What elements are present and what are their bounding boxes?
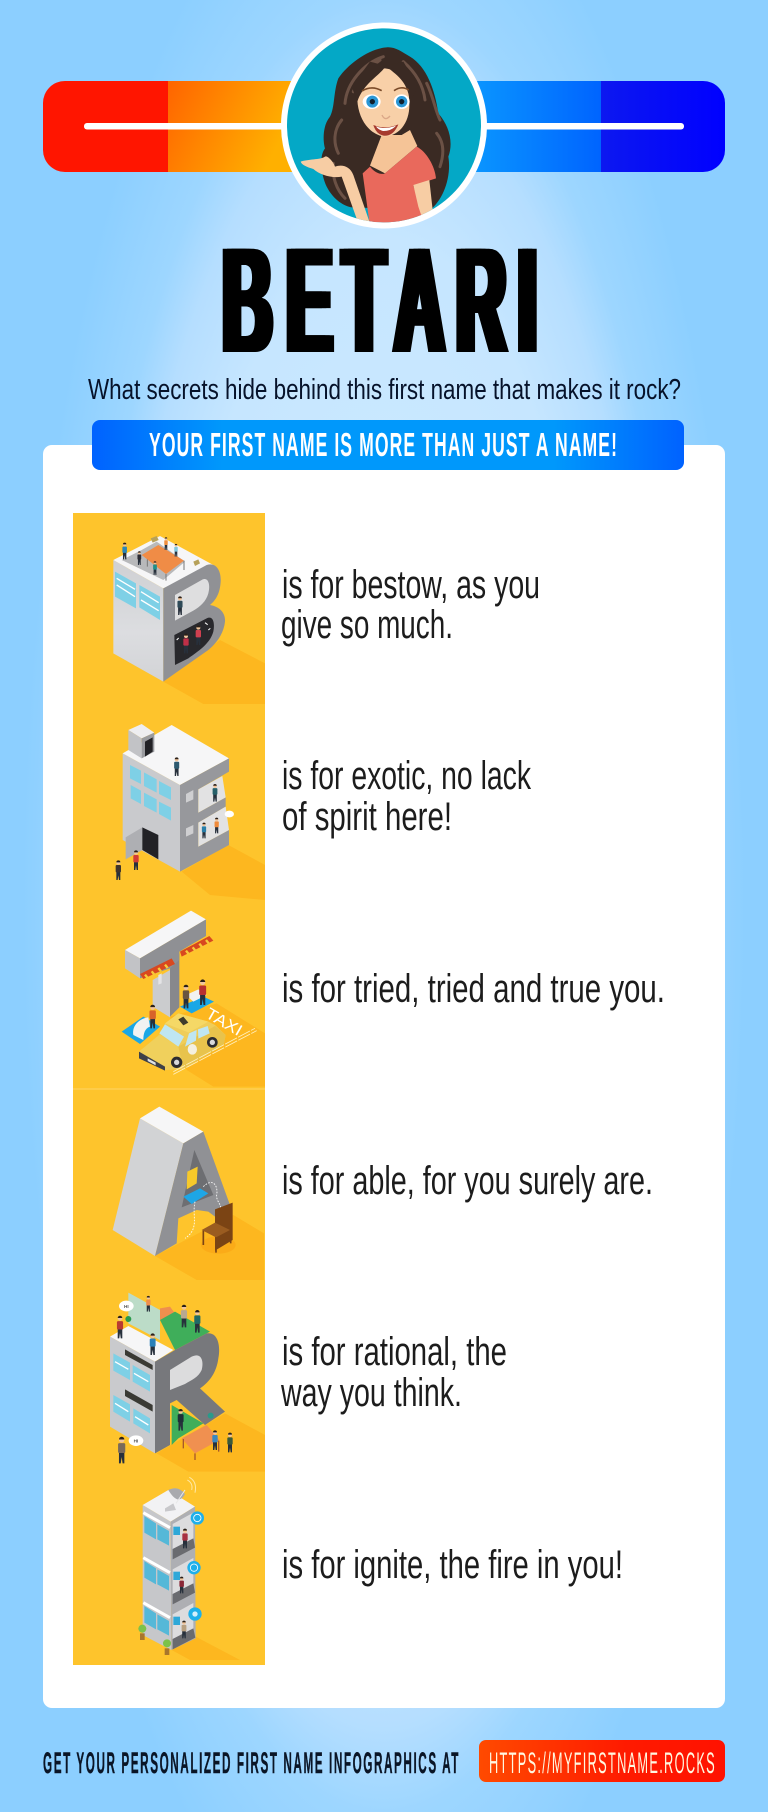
text: B line: give so much.: [281, 603, 453, 647]
white content panel: [43, 445, 725, 1708]
letter T taxi stand: TAXI: [202, 1005, 245, 1040]
title: BETARI: I: [518, 216, 537, 384]
white rule across header bar: [84, 123, 684, 130]
letter R building: [110, 1293, 265, 1472]
avatar: woman in circle: [281, 22, 487, 228]
header bar: right blue: [475, 81, 725, 172]
letter E building: [116, 724, 265, 900]
text: E line: is for exotic, no lack: [282, 754, 532, 798]
text: I line: is for ignite, the fire in you!: [282, 1543, 623, 1587]
text: E line: of spirit here!: [282, 795, 452, 839]
letter R building: HI: [124, 1304, 129, 1309]
title: BETARI: R: [456, 216, 506, 384]
header bar: left red-orange: [43, 81, 293, 172]
text: R line: way you think.: [280, 1371, 462, 1415]
letter R building: HI: [134, 1439, 138, 1444]
yellow illustration column: [73, 513, 265, 1665]
text: R line: [280, 1330, 507, 1415]
text: R line: is for rational, the: [282, 1330, 507, 1374]
text: E line: [282, 754, 532, 839]
text: B line: [281, 563, 540, 647]
letter A with chair: [113, 1107, 264, 1280]
title: BETARI: T: [343, 216, 385, 384]
footer url button: [479, 1740, 725, 1782]
title: BETARI: E: [286, 216, 332, 384]
letter B building: [113, 536, 265, 704]
title: BETARI: [222, 216, 537, 384]
text: B line: is for bestow, as you: [282, 563, 540, 607]
letter T taxi stand: [122, 911, 265, 1087]
letter I tower: [138, 1477, 240, 1660]
column seam: [73, 1088, 265, 1090]
title: BETARI: B: [222, 216, 272, 384]
banner: [92, 420, 684, 470]
title: BETARI: A: [394, 216, 444, 384]
